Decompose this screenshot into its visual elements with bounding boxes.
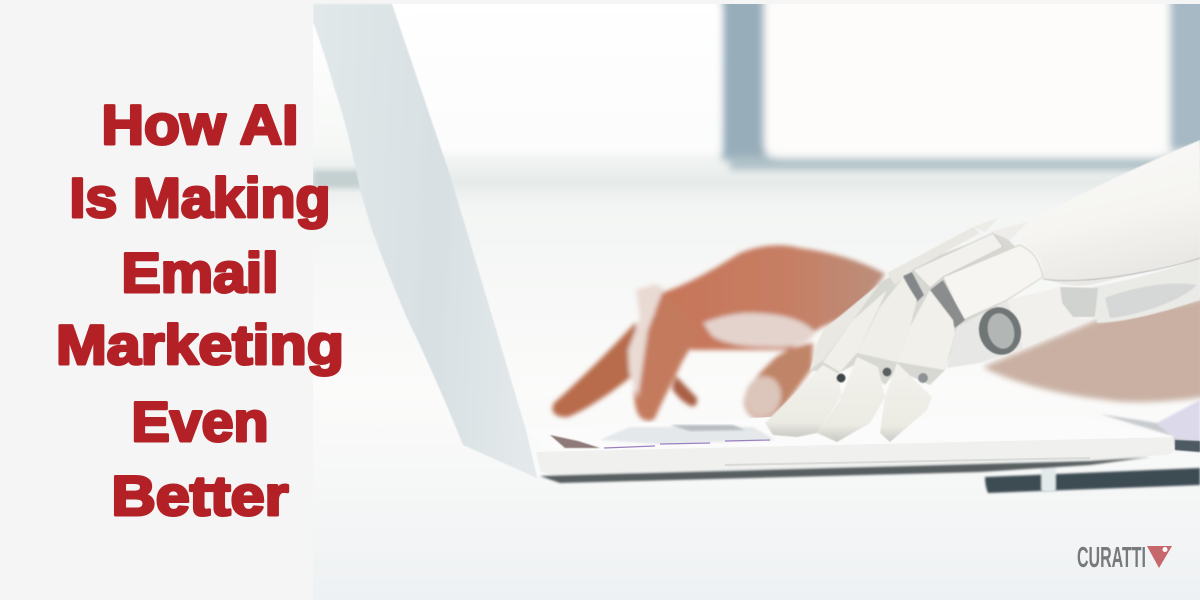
title: Email	[122, 241, 278, 304]
logo: Curatti: CURATTI	[1077, 542, 1146, 574]
title: Better	[112, 464, 288, 527]
second phalanx	[913, 233, 1003, 288]
back knuckles	[887, 227, 980, 285]
robot arm and hand	[765, 140, 1200, 442]
fingertips	[765, 365, 842, 437]
laptop lid	[313, 4, 537, 478]
title: Is Making	[70, 166, 330, 229]
laptop keyboard base	[526, 417, 1174, 483]
left panel background	[0, 0, 313, 600]
human forearm (blurred)	[983, 298, 1200, 402]
middle phalanges	[810, 283, 880, 370]
wrist underside	[1093, 258, 1200, 323]
forearm	[1020, 140, 1200, 286]
top strip	[0, 0, 1200, 4]
title	[56, 93, 344, 527]
tablet and pen at right edge	[985, 400, 1200, 493]
human hand (blurred)	[552, 245, 885, 423]
thumb	[953, 287, 1090, 367]
title: How AI	[102, 93, 298, 156]
hand underlay	[810, 232, 1040, 385]
title: Even	[132, 390, 268, 453]
first phalanx	[943, 245, 1043, 320]
icon: logo triangle	[1147, 546, 1172, 568]
photo: robot hand and human hand typing on a laptop	[313, 0, 1200, 600]
icon: thumb joint	[974, 302, 1026, 360]
title: Marketing	[56, 313, 344, 376]
metal joints	[903, 272, 924, 302]
blurred window background	[722, 0, 1200, 170]
